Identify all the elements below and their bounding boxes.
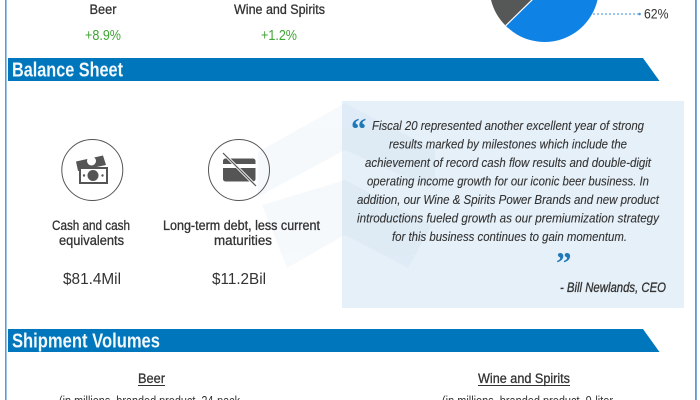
pie chart: [491, 0, 668, 42]
panel: Wine and Spirits shipments: [442, 371, 614, 400]
panel: CEO quote box: [342, 101, 684, 308]
label: 62%: 62%: [644, 6, 668, 22]
quote text: achievement of record cash flow results and double-digit: [365, 155, 652, 170]
value: Beer growth: +8.9%: [85, 28, 121, 44]
panel: cash: [52, 140, 130, 288]
quote text: [357, 118, 660, 244]
label: Cash and cash equivalents: [52, 218, 130, 248]
icon: crossed-out credit card: [208, 140, 270, 200]
label: Beer: Beer: [90, 2, 117, 17]
label: Long-term debt: maturities: [214, 233, 272, 248]
quote text: introductions fueled growth as our premiumization strategy: [357, 210, 660, 226]
quote attribution: - Bill Newlands, CEO: [560, 280, 666, 295]
icon: closing quote mark: ”: [556, 245, 572, 280]
label: Long-term debt: [163, 218, 320, 248]
heading: Shipment Volumes: Shipment Volumes: [12, 330, 160, 352]
heading: Balance Sheet: [8, 58, 660, 82]
panel: Beer shipments: [59, 371, 240, 400]
value: Wine and Spirits growth: +1.2%: [261, 28, 297, 44]
quote text: results marked by milestones which include the: [389, 136, 627, 152]
label: Wine and Spirits: Wine and Spirits: [234, 2, 325, 17]
subheading: Wine and Spirits: Wine and Spirits: [478, 371, 570, 386]
watermark: [258, 103, 435, 268]
label: Cash and cash equivalents: Cash and cash: [52, 218, 130, 233]
quote text: Fiscal 20 represented another excellent year of strong: [372, 118, 645, 133]
panel: segment growth: [85, 2, 325, 44]
label: Long-term debt: Long-term debt, less current: [163, 218, 320, 233]
quote text: for this business continues to gain momentum.: [392, 229, 627, 244]
heading: Balance Sheet: Balance Sheet: [12, 60, 123, 82]
value: long-term debt: $11.2Bil: [212, 271, 266, 288]
icon: opening quote mark: “: [351, 111, 366, 146]
panel: CEO quote: [351, 111, 666, 295]
icon: banknotes: [62, 140, 123, 200]
heading: Shipment Volumes: [8, 329, 660, 352]
label: Cash and cash equivalents: equivalents: [59, 233, 124, 248]
subheading: Beer: Beer: [138, 371, 165, 386]
quote text: addition, our Wine & Spirits Power Brands and new product: [357, 192, 660, 207]
panel: long-term debt: [163, 140, 320, 288]
quote text: operating income growth for our iconic beer business. In: [367, 174, 649, 188]
value: cash: $81.4Mil: [63, 271, 121, 288]
